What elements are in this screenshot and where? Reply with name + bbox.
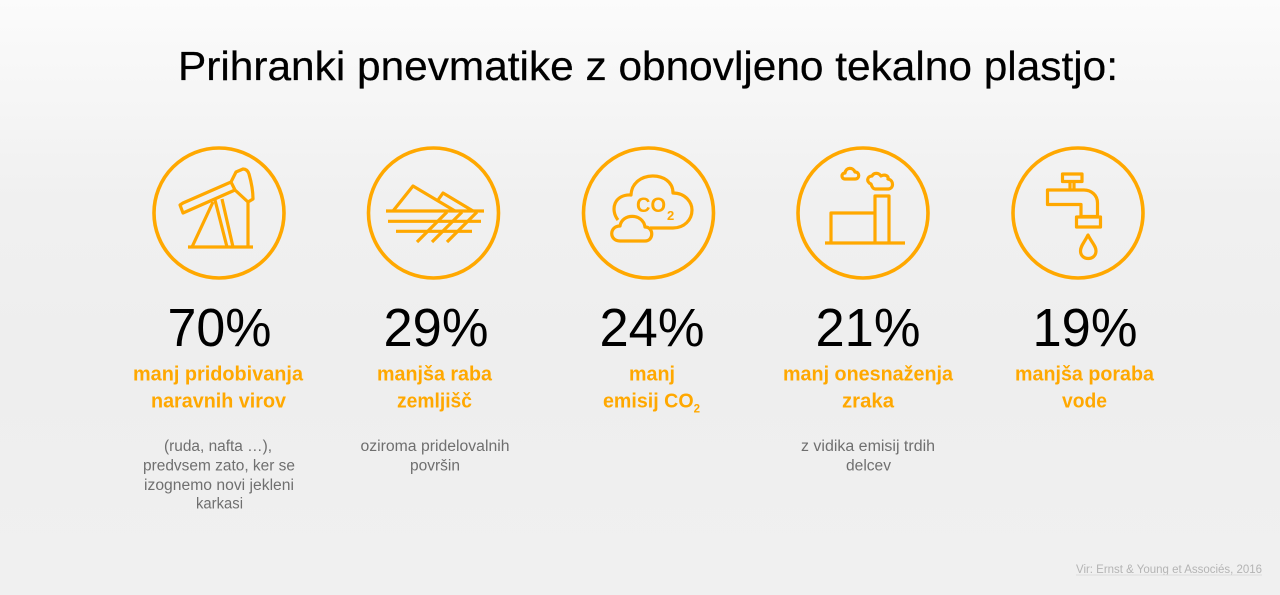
- stat: 24%: 24%: [600, 298, 704, 358]
- label: CO2 emissions: emisij CO: [603, 390, 698, 412]
- stat: 70%: 70%: [168, 298, 272, 358]
- icon: oil pump: [154, 148, 284, 278]
- label: air pollution: manj onesnaženja: [783, 362, 954, 386]
- label: land use: manjša raba: [377, 362, 493, 386]
- label: natural resources: manj pridobivanja: [133, 362, 304, 386]
- panel: natural resources: [133, 148, 304, 512]
- label: air pollution: zraka: [842, 390, 895, 412]
- icon: CO2 clouds: [584, 148, 714, 278]
- label: natural resources: [133, 362, 304, 412]
- note: land use: površin: [410, 458, 460, 474]
- icon: fields: [368, 148, 498, 278]
- icon: factory: [798, 148, 928, 278]
- stat: 19%: 19%: [1032, 298, 1138, 358]
- label: land use: zemljišč: [397, 390, 472, 412]
- label: land use: [377, 362, 493, 412]
- stat: 21%: 21%: [816, 298, 920, 358]
- note: air pollution: [801, 438, 935, 474]
- source note: Vir: Ernst & Young et Associés, 2016: [1076, 564, 1262, 576]
- panel: land use: [360, 148, 510, 474]
- note: land use: oziroma pridelovalnih: [360, 438, 510, 455]
- stat: 29%: 29%: [384, 298, 488, 358]
- note: natural resources: [143, 438, 295, 512]
- note: air pollution: z vidika emisij trdih: [801, 438, 935, 455]
- note: land use: [360, 438, 510, 474]
- label: water use: [1015, 362, 1155, 412]
- icon: tap: [1013, 148, 1143, 278]
- note: air pollution: delcev: [846, 458, 891, 474]
- label: water use: manjša poraba: [1015, 362, 1155, 386]
- icon: CO2 clouds: CO: [636, 194, 666, 217]
- icon: CO2 clouds: 2: [667, 208, 674, 223]
- note: natural resources: karkasi: [196, 496, 243, 512]
- note: natural resources: (ruda, nafta …),: [164, 438, 272, 455]
- panel: air pollution: [783, 148, 954, 474]
- note: natural resources: izognemo novi jekleni: [144, 477, 294, 494]
- panel: CO2 emissions: [584, 148, 714, 416]
- label: air pollution: [783, 362, 954, 412]
- panel: water use: [1013, 148, 1155, 412]
- label: CO2 emissions: manj: [629, 362, 675, 386]
- label: CO2 emissions: [603, 362, 700, 416]
- label: CO2 emissions: 2: [694, 402, 700, 416]
- note: natural resources: predvsem zato, ker se: [143, 458, 295, 474]
- title: Prihranki pnevmatike z obnovljeno tekalno plastjo:: [178, 43, 1118, 89]
- label: water use: vode: [1062, 390, 1107, 412]
- label: natural resources: naravnih virov: [151, 390, 287, 412]
